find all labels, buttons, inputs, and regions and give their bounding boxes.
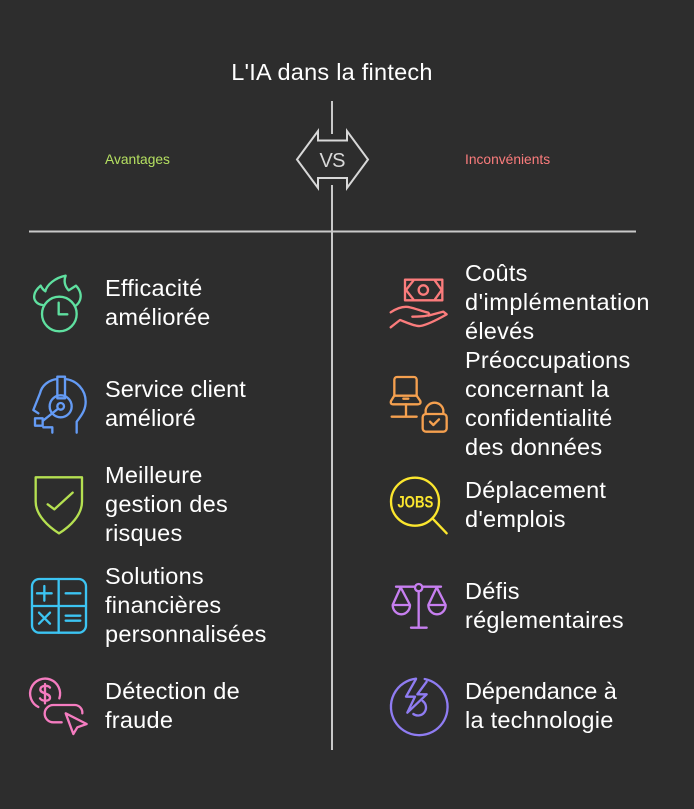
text: Solutions financières personnalisées: Solutions bbox=[105, 563, 204, 589]
icon: shield with check bbox=[34, 476, 84, 534]
text: Défis réglementaires bbox=[465, 578, 624, 633]
text: Préoccupations concernant la confidentialité des données: des données bbox=[465, 434, 602, 460]
text: Détection de fraude: Détection de bbox=[105, 678, 240, 704]
text: Déplacement d'emplois: d'emplois bbox=[465, 506, 566, 532]
icon: VS double arrow: VS bbox=[320, 150, 346, 172]
text: Solutions financières personnalisées: personnalisées bbox=[105, 621, 267, 647]
icon: laptop and padlock bbox=[390, 376, 448, 433]
icon: flame and clock bbox=[33, 274, 82, 332]
text: Dépendance à la technologie bbox=[465, 678, 617, 733]
text: Coûts d'implémentation élevés: élevés bbox=[465, 318, 534, 344]
icon: calculator bbox=[30, 578, 88, 634]
text: Défis réglementaires: réglementaires bbox=[465, 607, 624, 633]
icon: lightning in circle bbox=[390, 678, 449, 736]
text: Dépendance à la technologie: Dépendance à bbox=[465, 678, 617, 704]
text: Déplacement d'emplois bbox=[465, 477, 606, 532]
text: Efficacité améliorée: Efficacité bbox=[105, 275, 202, 301]
text: Déplacement d'emplois: Déplacement bbox=[465, 477, 606, 503]
text: Service client amélioré bbox=[105, 376, 246, 431]
text: Meilleure gestion des risques: gestion des bbox=[105, 491, 228, 517]
text: Dépendance à la technologie: la technologie bbox=[465, 707, 614, 733]
text: Coûts d'implémentation élevés bbox=[465, 260, 650, 344]
panel: disadvantages bbox=[390, 260, 650, 736]
text: Préoccupations concernant la confidentialité des données: concernant la bbox=[465, 376, 609, 402]
icon: dollar, field and cursor bbox=[28, 677, 88, 736]
text: Meilleure gestion des risques: Meilleure bbox=[105, 462, 203, 488]
heading: Avantages: Avantages bbox=[105, 152, 170, 167]
text: Efficacité améliorée: améliorée bbox=[105, 304, 210, 330]
icon: headset agent bbox=[32, 376, 87, 434]
text: Solutions financières personnalisées: financières bbox=[105, 592, 221, 618]
title: L'IA dans la fintech bbox=[231, 59, 433, 85]
text: Service client amélioré: Service client bbox=[105, 376, 246, 402]
text: Détection de fraude: fraude bbox=[105, 707, 173, 733]
icon: money over hand bbox=[390, 278, 448, 329]
text: Détection de fraude bbox=[105, 678, 240, 733]
text: Coûts d'implémentation élevés: Coûts bbox=[465, 260, 528, 286]
text: Solutions financières personnalisées bbox=[105, 563, 267, 647]
icon: magnifier with JOBS bbox=[390, 476, 448, 535]
icon: VS double arrow bbox=[296, 128, 370, 191]
text: Meilleure gestion des risques: risques bbox=[105, 520, 183, 546]
text: Coûts d'implémentation élevés: d'implémentation bbox=[465, 289, 650, 315]
text: Efficacité améliorée bbox=[105, 275, 210, 330]
panel: advantages bbox=[28, 274, 267, 736]
text: Défis réglementaires: Défis bbox=[465, 578, 520, 604]
text: Préoccupations concernant la confidentialité des données: confidentialité bbox=[465, 405, 612, 431]
text: Service client amélioré: amélioré bbox=[105, 405, 196, 431]
icon: balance scales bbox=[392, 582, 447, 629]
text: Meilleure gestion des risques bbox=[105, 462, 228, 546]
text: Préoccupations concernant la confidentialité des données bbox=[465, 347, 630, 460]
heading: Inconvénients: Inconvénients bbox=[465, 152, 550, 167]
icon: magnifier with JOBS: JOBS bbox=[397, 493, 433, 512]
text: Préoccupations concernant la confidentialité des données: Préoccupations bbox=[465, 347, 630, 373]
